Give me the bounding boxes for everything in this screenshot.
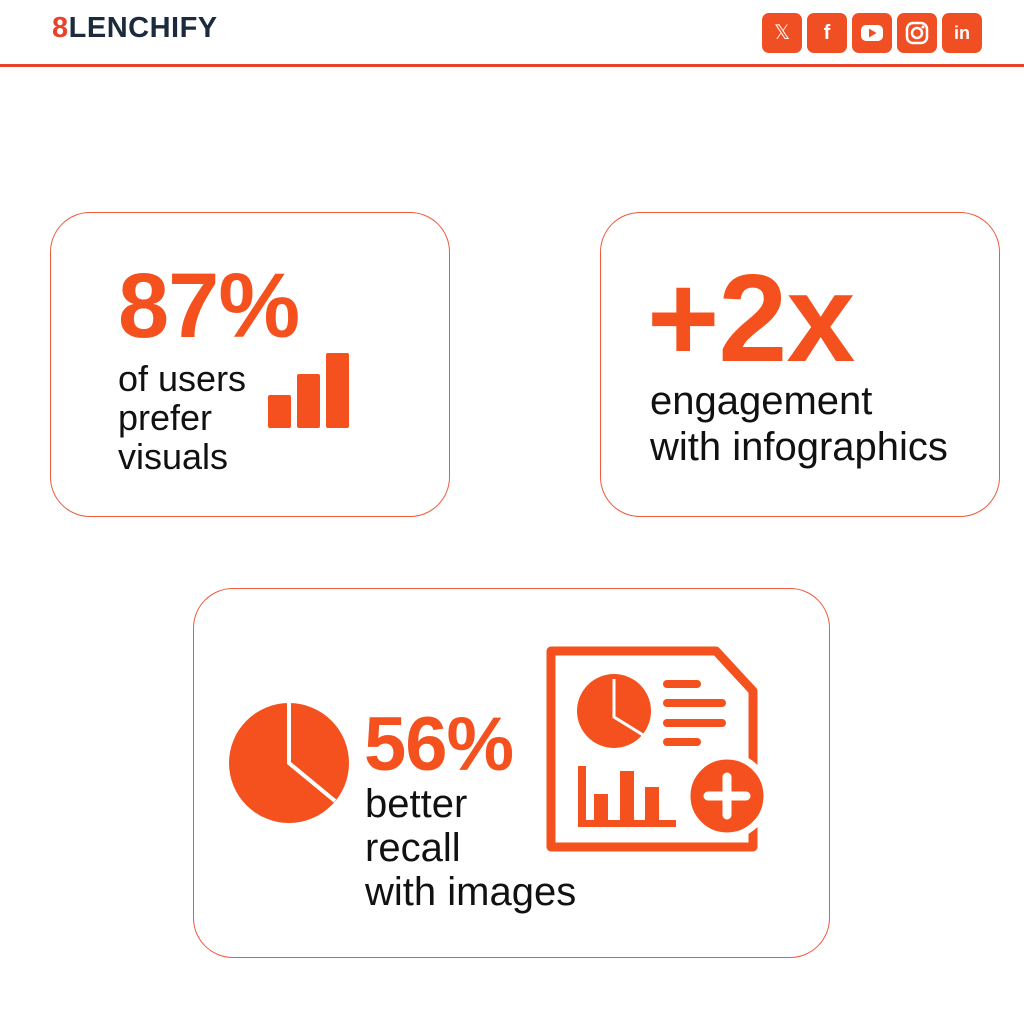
stat +2x: +2x: [647, 250, 854, 388]
icon: x: [762, 13, 802, 53]
text: [118, 358, 246, 477]
icon: instagram: [897, 13, 937, 53]
text: of users: [118, 358, 246, 399]
icon: pie chart: [229, 703, 349, 823]
text: with images: [365, 870, 576, 914]
stat 56%: 56%: [364, 702, 513, 787]
icon: bar chart: [268, 353, 349, 428]
panel: 56% better recall: [193, 588, 830, 958]
text: with infographics: [650, 425, 948, 469]
logo: 8LENCHIFY: [52, 12, 218, 44]
text: [650, 379, 948, 469]
text: better: [365, 782, 467, 826]
icon: linkedin: in: [954, 23, 970, 43]
stat 87%: 87%: [118, 255, 299, 357]
icon: youtube: [852, 13, 892, 53]
icon: facebook: f: [824, 22, 830, 44]
text: [365, 782, 576, 914]
icon: x: 𝕏: [774, 22, 790, 44]
text: prefer: [118, 397, 212, 438]
text: recall: [365, 826, 461, 870]
panel: 87% users prefer visuals: [50, 212, 450, 517]
header divider: [0, 64, 1024, 67]
text: engagement: [650, 379, 872, 423]
panel: +2x engagement: [600, 212, 1000, 517]
icon: facebook: [807, 13, 847, 53]
social icons: [762, 13, 982, 53]
text: visuals: [118, 436, 228, 477]
icon: report document: [546, 646, 764, 852]
icon: linkedin: [942, 13, 982, 53]
